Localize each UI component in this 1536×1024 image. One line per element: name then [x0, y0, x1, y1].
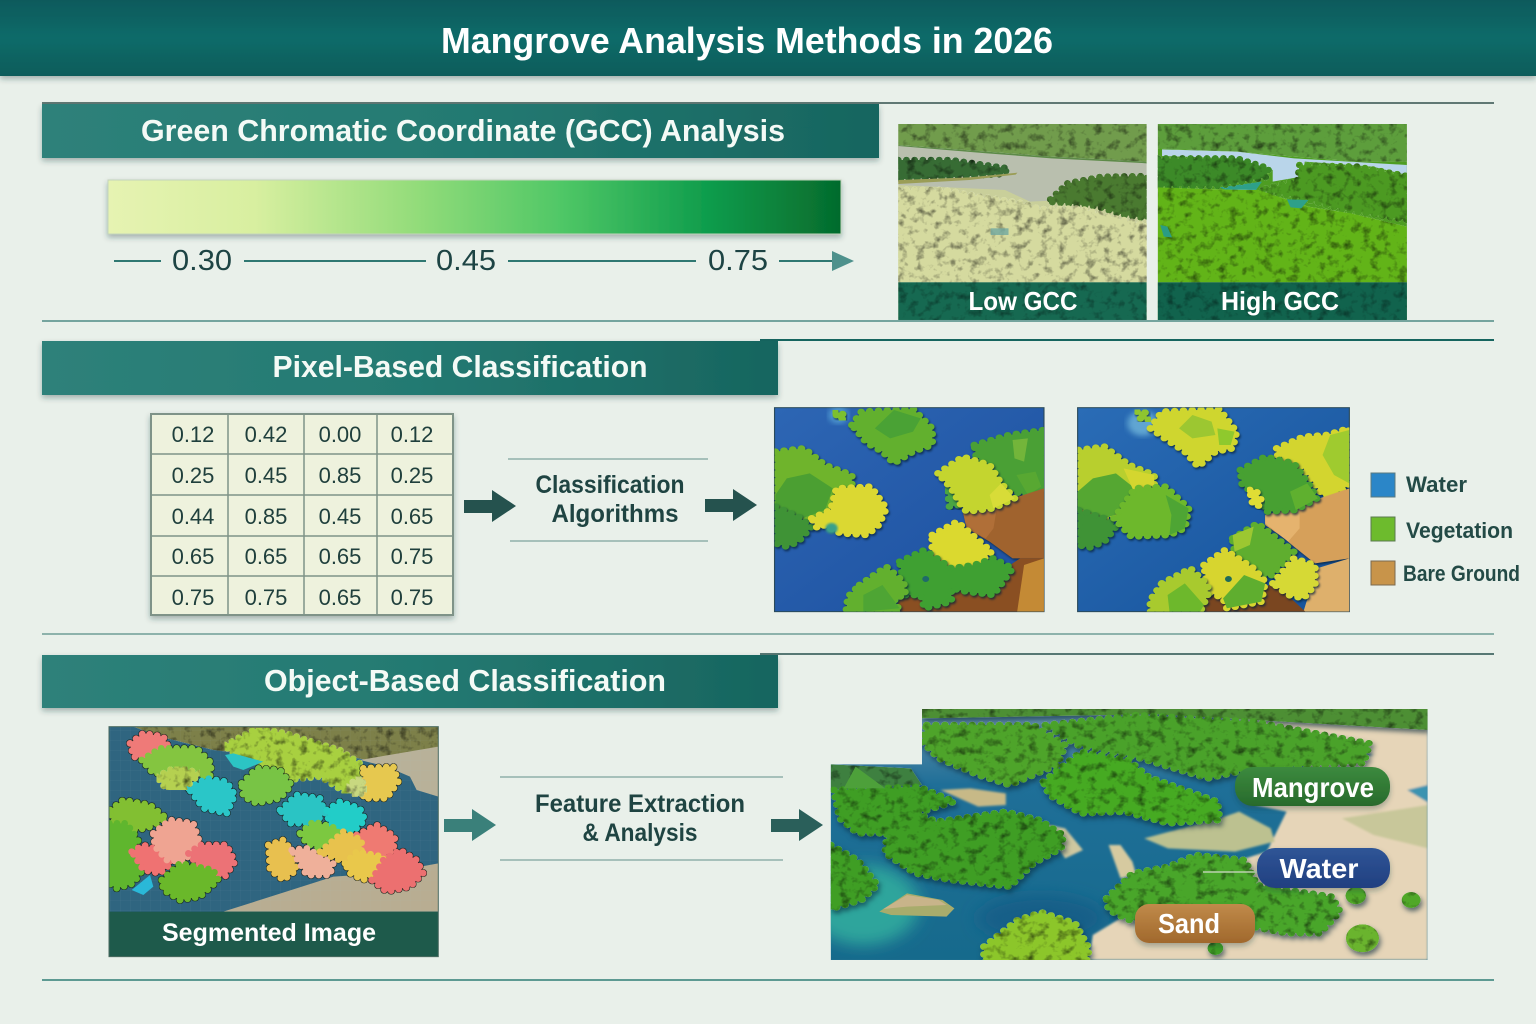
GCC scale axis with values: 0.45: [436, 245, 496, 277]
classified map 2: [1078, 408, 1349, 612]
GCC scale axis with values: [114, 245, 854, 277]
photo: Low GCC mangrove: [898, 124, 1147, 320]
pixel value table: 0.75: [391, 544, 433, 569]
pixel value table: 0.44: [172, 504, 214, 529]
pixel value table: 0.65: [319, 585, 361, 610]
legend: Water: [1406, 472, 1467, 497]
pixel value table: 0.85: [319, 463, 361, 488]
panel: Pixel-based classification: [42, 341, 1520, 615]
legend: Bare Ground: [1403, 561, 1520, 586]
label: Water: [1257, 848, 1390, 888]
arrow: segmented to features: [444, 809, 496, 841]
aerial result photo: [808, 709, 1428, 960]
label: Segmented Image: Segmented Image: [162, 919, 376, 947]
segmented image: [109, 727, 438, 957]
heading: Object-based classification: [42, 655, 778, 708]
arrow: algorithms to maps: [705, 489, 757, 521]
title banner: [0, 0, 1536, 76]
text: Feature Extraction & Analysis: Feature Extraction: [535, 790, 745, 818]
label: High GCC: High GCC: [1221, 286, 1339, 316]
label: Sand: [1135, 904, 1255, 943]
pixel value table: 0.45: [245, 463, 287, 488]
GCC gradient bar: [108, 180, 841, 234]
pixel value table: 0.25: [391, 463, 433, 488]
legend: Vegetation: [1406, 518, 1513, 543]
pixel value table: 0.75: [245, 585, 287, 610]
pixel value table: 0.12: [172, 422, 214, 447]
pixel value table: 0.65: [391, 504, 433, 529]
title banner: Mangrove Analysis Methods in 2026: [441, 20, 1053, 61]
pixel value table: 0.25: [172, 463, 214, 488]
GCC scale axis with values: 0.30: [172, 245, 232, 277]
heading: Object-based classification: Object-Based Classification: [264, 663, 666, 698]
pixel value table: 0.65: [172, 544, 214, 569]
pixel value table: 0.75: [391, 585, 433, 610]
pixel value table: 0.00: [319, 422, 361, 447]
arrow: features to result: [771, 809, 823, 841]
text: Classification Algorithms: Algorithms: [552, 500, 678, 528]
pixel value table: 0.65: [319, 544, 361, 569]
text: Classification Algorithms: Classification: [536, 471, 684, 499]
pixel value table: 0.75: [172, 585, 214, 610]
heading: Pixel-based classification: Pixel-Based Classification: [272, 349, 648, 384]
panel: Object-based classification: [42, 655, 1428, 960]
photo: High GCC mangrove: [1158, 124, 1407, 320]
text: Feature Extraction & Analysis: & Analysis: [582, 819, 698, 847]
label: Mangrove: [1235, 767, 1390, 806]
label: Sand: Sand: [1158, 908, 1220, 939]
GCC scale axis with values: 0.75: [708, 245, 768, 277]
label: Mangrove: Mangrove: [1252, 772, 1374, 803]
heading: GCC analysis: Green Chromatic Coordinate (GCC) Analysis: [141, 113, 785, 148]
pixel value table: [151, 414, 453, 615]
label: Low GCC: Low GCC: [968, 286, 1078, 316]
pixel value table: 0.85: [245, 504, 287, 529]
pixel value table: 0.45: [319, 504, 361, 529]
label: Water: Water: [1280, 853, 1359, 884]
arrow: table to algorithms: [464, 490, 516, 522]
pixel value table: 0.42: [245, 422, 287, 447]
text: Classification Algorithms: [508, 459, 708, 541]
panel: GCC analysis: [42, 104, 1407, 320]
text: Feature Extraction & Analysis: [500, 777, 783, 860]
pixel value table: 0.65: [245, 544, 287, 569]
classified map 1: [775, 406, 1044, 612]
heading: Pixel-based classification: [42, 341, 778, 395]
pixel value table: 0.12: [391, 422, 433, 447]
legend: [1371, 472, 1520, 586]
callout line to Water label: [1203, 871, 1258, 873]
heading: GCC analysis: [42, 104, 879, 158]
